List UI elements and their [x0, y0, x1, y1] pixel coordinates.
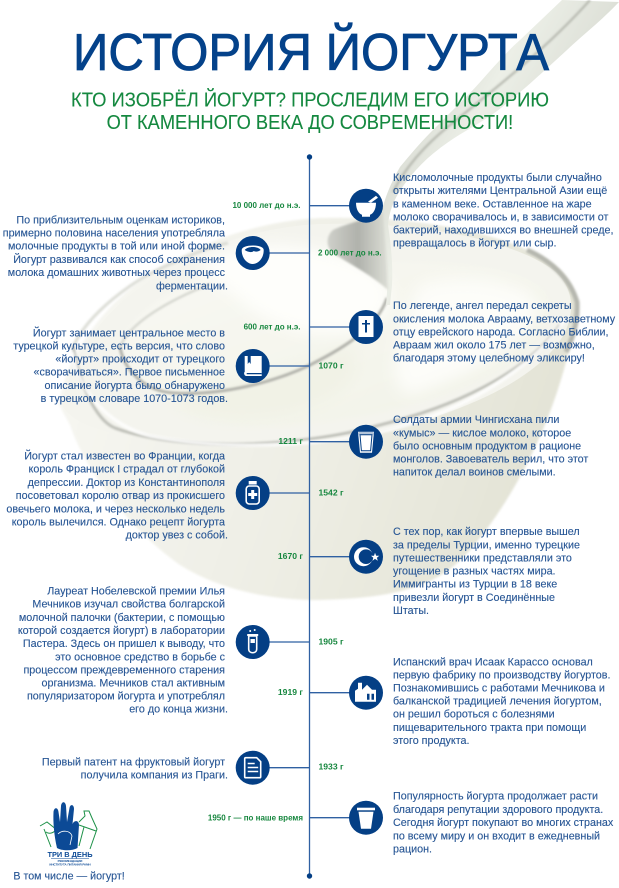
text block: 600 years BC: окисления молока Аврааму, ветхозаветному [393, 313, 616, 325]
date labels: 1542 г [318, 488, 344, 498]
icon: crescent and star [349, 540, 383, 574]
text block: 1950 to present [393, 791, 614, 855]
text block: 10 000 years BC [393, 172, 613, 250]
background: yogurt bowl [59, 218, 577, 600]
date labels: 1950 г — по наше время [208, 814, 303, 823]
text block: 1919 [393, 656, 610, 747]
date labels: 600 лет до н.э. [244, 323, 300, 332]
icon: bowl of yogurt [236, 236, 270, 270]
text block: 600 years BC: отцу еврейского народа. Согласно Библии, [393, 326, 608, 338]
date labels: 1919 г [278, 687, 303, 697]
icon: factory [349, 676, 383, 710]
icon: yogurt cup [349, 801, 383, 835]
logo: three a day: ИНСТИТУТА ПИТАНИЯ РАМН [49, 862, 91, 866]
text block: 1905: которой создается йогурт) в лаборатории [18, 625, 225, 637]
bowl rim [72, 243, 577, 445]
text block: 1919: этого продукта. [393, 735, 469, 747]
text block: 1670: Иммигранты из Турции в 18 веке [393, 579, 557, 591]
text block: 1905: молочной палочки (бактерии, с помощью [19, 612, 225, 624]
timeline axis [253, 154, 366, 879]
text block: 1905: это основное средство в борьбе с [55, 651, 226, 663]
text block: 1670: путешественники представляли это [393, 552, 572, 564]
icon: test tube [236, 625, 270, 659]
text block: 10 000 years BC: молоко сворачивалось и, в зависимости от [393, 211, 609, 223]
text block: 1542: король вылечился. Однако рецепт йогурта [12, 516, 225, 528]
text block: 1070 [13, 326, 228, 405]
text block: 1542: посоветовал королю отвар из прокисшего [16, 490, 225, 502]
date labels [208, 201, 382, 823]
date labels: 10 000 лет до н.э. [232, 201, 300, 210]
icon: mortar and pestle [349, 189, 383, 223]
text block: 600 years BC: Авраам жил около 175 лет — возможно, [393, 339, 595, 351]
text block: 2 000 years BC: ферментации. [156, 280, 228, 292]
icon: bible [349, 310, 383, 344]
text block: 2 000 years BC [3, 215, 228, 292]
text block: 600 years BC [393, 300, 616, 365]
text block: 1070: описание йогурта было обнаружено [45, 380, 225, 392]
text block: 1211 [393, 414, 588, 479]
date labels: 1211 г [278, 436, 303, 446]
text block: 1211: монголов. Завоеватель верил, что этот [393, 454, 588, 466]
icon: medicine bottle [236, 476, 270, 510]
text block: 2 000 years BC: По приблизительным оценкам историков, [16, 215, 225, 227]
text block: 1905: процессом преждевременного старения [23, 664, 225, 676]
icon: glass [349, 425, 383, 459]
text block: 1070: «сворачиваться». Первое письменное [34, 367, 225, 379]
text block: 1950 to present: Сегодня йогурт покупают во многих странах [393, 817, 614, 829]
date labels: 1905 г [318, 637, 344, 647]
text block: 1919: пищеварительного тракта при помощи [393, 722, 586, 734]
text block: 1070: в турецком словаре 1070-1073 годов. [41, 393, 228, 405]
text block: 2 000 years BC: молочные продукты в той или иной форме. [8, 241, 225, 253]
text block: 2 000 years BC: примерно половина населения употребляла [3, 228, 225, 240]
text block: 1919: Познакомившись с работами Мечникова и [393, 682, 605, 694]
subtitle [71, 88, 549, 134]
date labels: 1070 г [318, 361, 344, 371]
text block: 1070: Йогурт занимает центральное место в [33, 326, 225, 339]
text block: 1933: Первый патент на фруктовый йогурт [42, 756, 225, 768]
text block: 1905: Лауреат Нобелевской премии Илья [47, 586, 225, 598]
logo: three a day: РЕКОМЕНДАЦИИ [58, 859, 82, 863]
yogurt swirl highlights [170, 245, 540, 420]
text block: 1542: Йогурт стал известен во Франции, когда [24, 450, 225, 463]
text block: 1919: первую фабрику по производству йогуртов. [393, 669, 610, 681]
text block: 1919: балканской традицией лечения йогуртом, [393, 696, 602, 708]
date labels: 1670 г [278, 551, 303, 561]
text block: 1905: организма. Мечников стал активным [42, 677, 225, 689]
text block: 1211: Солдаты армии Чингисхана пили [393, 414, 559, 426]
text block: 600 years BC: По легенде, ангел передал секреты [393, 300, 572, 312]
text block: 1670: С тех пор, как йогурт впервые вышел [393, 526, 580, 538]
text block: 1542: овечьего молока, и через несколько недель [6, 503, 225, 515]
background: spoon [328, 0, 619, 305]
text block: 1211: напиток делал воинов смелыми. [393, 467, 556, 479]
text block: 1070: турецкой культуре, есть версия, что слово [13, 341, 225, 353]
text block: 1670: Штаты. [393, 605, 429, 617]
subtitle: КТО ИЗОБРЁЛ ЙОГУРТ? ПРОСЛЕДИМ ЕГО ИСТОРИЮ [71, 88, 549, 112]
text block: 1905 [18, 586, 228, 716]
text block: 1950 to present: по всему миру и он входит в ежедневный [393, 830, 600, 842]
text block: 1670: угощение в разных частях мира. [393, 566, 556, 578]
logo: three a day [40, 802, 97, 866]
text block: 1950 to present: рацион. [393, 843, 432, 855]
text block: 1905: популяризатором йогурта и употреблял [27, 691, 225, 703]
text block: 10 000 years BC: в каменном веке. Оставленное на жаре [393, 198, 592, 210]
subtitle: ОТ КАМЕННОГО ВЕКА ДО СОВРЕМЕННОСТИ! [107, 112, 513, 134]
text block: 1670: за пределы Турции, именно турецкие [393, 539, 580, 551]
text block: 1542: депрессии. Доктор из Константинополя [28, 477, 225, 489]
text block: 1542 [6, 450, 228, 541]
text block: 1542: король Франциск I страдал от глубокой [29, 464, 225, 476]
text block: 1211: было основным продуктом в рационе [393, 441, 581, 453]
text block: 1211: «кумыс» — кислое молоко, которое [393, 427, 571, 439]
text block: 1905: Мечников изучал свойства болгарской [32, 599, 225, 611]
text block: 10 000 years BC: превращалось в йогурт или сыр. [393, 238, 556, 250]
text block: 1933 [42, 756, 228, 781]
date labels: 2 000 лет до н.э. [318, 249, 382, 258]
text block: 1919: он решил бороться с болезнями [393, 709, 555, 721]
text block: 1919: Испанский врач Исаак Карассо основал [393, 656, 593, 668]
icon: book [236, 349, 270, 383]
text block: 10 000 years BC: Кисломолочные продукты были случайно [393, 172, 602, 184]
text block: 600 years BC: благодаря этому целебному эликсиру! [393, 353, 585, 365]
text block: 1542: доктор увез с собой. [126, 529, 228, 541]
text block: 1933: получила компания из Праги. [81, 769, 228, 781]
footer caption: В том числе — йогурт! [13, 870, 125, 882]
title: ИСТОРИЯ ЙОГУРТА [73, 23, 549, 82]
text block: 1670 [393, 526, 580, 617]
text block: 2 000 years BC: молока домашних животных через процесс [8, 267, 226, 279]
text block: 2 000 years BC: Йогурт развивался как способ сохранения [13, 253, 225, 266]
logo: three a day: ТРИ В ДЕНЬ [47, 850, 93, 859]
text block: 1950 to present: благодаря репутации здорового продукта. [393, 804, 603, 816]
text block: 1070: «йогурт» происходит от турецкого [55, 354, 225, 366]
text block: 10 000 years BC: бактерий, находившихся во внешней среде, [393, 225, 613, 237]
text block: 1905: его до конца жизни. [129, 704, 228, 716]
date labels: 1933 г [318, 762, 344, 772]
text block: 1670: привезли йогурт в Соединённые [393, 592, 555, 604]
text block: 1905: Пастера. Здесь он пришел к выводу, что [23, 638, 225, 650]
text block: 10 000 years BC: открыты жителями Центральной Азии ещё [393, 185, 607, 197]
text block: 1950 to present: Популярность йогурта продолжает расти [393, 791, 598, 803]
icon: document [236, 751, 270, 785]
